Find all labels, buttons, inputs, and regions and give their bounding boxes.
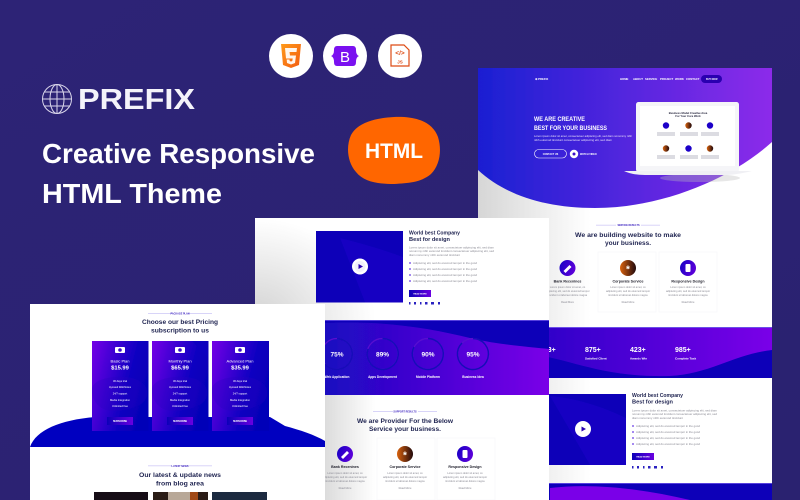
service card: responsive: Lorem ipsum dolor sit amet, co xyxy=(670,285,706,289)
provider heading: Service your business. xyxy=(369,426,441,433)
icon: bootstrap: B xyxy=(340,49,350,66)
provider heading xyxy=(357,410,454,433)
about copy: Adipiscing elit, sed do eiusmod tempor in the good xyxy=(413,267,478,271)
progress ring: 90% xyxy=(412,338,444,379)
service card: bank: Lorem ipsum dolor sit amet, co xyxy=(550,285,586,289)
about section: diam nonummy nibh euismod tincidunt xyxy=(632,416,683,420)
hero buttons xyxy=(534,150,597,158)
service card: corporate: * xyxy=(626,264,630,276)
pricing heading: Choose our best Pricing xyxy=(142,319,218,326)
pricing card: basic: Media Integration xyxy=(110,398,131,402)
icon: js file: JS xyxy=(397,60,403,64)
hero section xyxy=(478,68,772,208)
pricing card: basic: SUBSCRIBE xyxy=(113,420,127,423)
pricing card: advanced: 30 days trial xyxy=(233,379,247,383)
service card: corporate: Read More xyxy=(622,300,635,304)
badge: HTML: HTML xyxy=(365,140,423,163)
laptop mockup: Business Model Creative Area xyxy=(669,111,708,115)
service card: responsive: Responsive Design xyxy=(671,280,705,284)
about section: Best for design xyxy=(632,400,674,406)
about section: Adipiscing elit, sed do eiusmod tempor in the good xyxy=(636,430,701,434)
services heading: We are building website to make xyxy=(575,232,681,239)
progress ring: 90%: 90% xyxy=(421,352,435,358)
brand logo xyxy=(42,84,196,116)
stats band xyxy=(549,327,772,378)
about copy: READ MORE xyxy=(413,292,427,296)
hero nav: CONTACT xyxy=(686,77,700,81)
provider card: responsive: Read More xyxy=(459,486,472,490)
tech icons xyxy=(269,34,422,78)
service card: responsive: tincidunt ut laboreet dolore magna xyxy=(668,293,708,297)
panel: right page preview xyxy=(478,68,772,500)
about section: READ MORE xyxy=(636,456,650,458)
pricing card: monthly: 24/7 support xyxy=(173,392,187,396)
service card: bank xyxy=(545,260,590,304)
pricing card: monthly: Aymasit Webhiotes xyxy=(169,385,192,389)
pricing card: advanced: 24/7 support xyxy=(233,392,247,396)
title: Creative Responsive xyxy=(42,138,315,169)
pricing heading: subscription to us xyxy=(151,328,209,334)
hero nav: HOME xyxy=(620,77,629,81)
progress ring: 89% xyxy=(367,338,398,379)
panel: middle page preview xyxy=(255,218,549,500)
icon: js file xyxy=(378,34,422,78)
bottom band xyxy=(549,483,772,500)
wordmark: PREFIX xyxy=(78,84,196,116)
provider card: bank: Bank Recenines xyxy=(331,465,359,469)
pricing card: advanced xyxy=(212,341,269,431)
icon: globe xyxy=(42,84,72,114)
pricing card: monthly: Unlimited free xyxy=(172,404,189,408)
stats band: 985+ xyxy=(675,347,691,354)
service card: responsive xyxy=(666,260,710,303)
progress ring: 75%: 75% xyxy=(330,352,344,358)
hero copy xyxy=(534,117,633,142)
provider card: corporate: tincidunt ut laboreet dolore magna xyxy=(385,479,425,483)
about copy: diam nonummy nibh euismod tincidunt xyxy=(409,253,460,257)
blog heading: Our latest & update news xyxy=(139,472,221,479)
about copy: Adipiscing elit, sed do eiusmod tempor in the good xyxy=(413,273,478,277)
pricing card: advanced: Unlimited free xyxy=(232,404,249,408)
provider card: bank: tincidunt ut laboreet dolore magna xyxy=(325,479,365,483)
pricing card: basic: 30 days trial xyxy=(113,379,127,383)
about copy: Adipiscing elit, sed do eiusmod tempor in the good xyxy=(413,279,478,283)
provider card: corporate: Lorem ipsum dolor sit amet, co xyxy=(387,471,423,475)
pricing card: basic: $15.99 xyxy=(111,366,130,372)
hero nav: SERVICE xyxy=(645,77,657,81)
progress ring: 90%: Mobile Platform xyxy=(416,375,440,379)
services heading xyxy=(575,224,681,247)
stats band: About App xyxy=(530,356,545,360)
service card: responsive: Read More xyxy=(682,300,695,304)
provider card: responsive: tincidunt ut laboreet dolore magna xyxy=(445,479,485,483)
service card: bank: Bank Recenines xyxy=(554,280,581,284)
pricing card: advanced: $35.99 xyxy=(231,366,250,372)
provider card: corporate: * xyxy=(403,450,407,462)
stats band: 875+ xyxy=(585,347,601,354)
about copy: World best Company xyxy=(409,230,461,236)
laptop mockup: For Your Core Work xyxy=(675,114,701,118)
about section: nonummy nibh euismod tincidunt consectetuer adipiscing elit, sed xyxy=(632,412,718,416)
stats band: 423+ xyxy=(630,347,646,354)
hero copy: nibh euismod tincidunt consectetuer adipiscing elit, sed diam xyxy=(534,139,612,142)
pricing card: monthly: SUBSCRIBE xyxy=(173,420,187,423)
provider card: corporate xyxy=(383,446,428,489)
service card: bank: adipiscing elit, sed do eiusmod tempor xyxy=(545,289,590,293)
progress ring: 75%: Web Application xyxy=(325,375,349,379)
pricing heading xyxy=(142,312,218,334)
hero copy: WE ARE CREATIVE xyxy=(534,117,585,123)
about section: Adipiscing elit, sed do eiusmod tempor in the good xyxy=(636,424,701,428)
pricing heading: PACKAGE PLAN xyxy=(171,312,190,315)
progress ring: 75% xyxy=(322,338,352,379)
provider card: responsive: Responsive Design xyxy=(448,465,482,469)
about section xyxy=(549,393,717,468)
progress ring: 89%: Apps Development xyxy=(368,375,398,379)
panel: left pricing preview xyxy=(30,304,325,500)
provider card: responsive xyxy=(443,446,488,489)
pricing card: monthly: Media Integration xyxy=(170,398,191,402)
blog heading: LATEST NEWS xyxy=(172,465,189,468)
hero nav: PROJECT xyxy=(660,77,674,81)
service card: corporate xyxy=(606,260,650,303)
about section: World best Company xyxy=(632,393,684,399)
service card: bank: tincidunt ut laboreet dolore magna xyxy=(548,293,588,297)
progress ring: 95% xyxy=(457,338,488,379)
about copy: Adipiscing elit, sed do eiusmod tempor in the good xyxy=(413,261,478,265)
icon: js file: </> xyxy=(395,50,405,57)
about section: Adipiscing elit, sed do eiusmod tempor in the good xyxy=(636,436,701,440)
blog images xyxy=(94,492,267,500)
provider card: bank xyxy=(323,446,367,490)
provider heading: We are Provider For the Below xyxy=(357,418,454,425)
stats band: Complete Task xyxy=(675,356,696,360)
provider card: bank: Read More xyxy=(339,486,352,490)
blue hill xyxy=(30,417,325,447)
pricing card: monthly: Monthly Plan xyxy=(168,358,192,364)
provider card: responsive: adipiscing elit, sed do eiusmod tempor xyxy=(443,475,487,479)
service card: corporate: Corporate Service xyxy=(613,280,643,284)
pricing card: advanced: Aymasit Webhiotes xyxy=(229,385,252,389)
about copy xyxy=(409,230,495,304)
provider card: responsive: Lorem ipsum dolor sit amet, co xyxy=(447,471,483,475)
service card: responsive: adipiscing elit, sed do eiusmod tempor xyxy=(666,289,710,293)
service card: corporate: Lorem ipsum dolor sit amet, co xyxy=(610,285,646,289)
pricing card: basic: Basic Plan xyxy=(111,358,129,364)
progress ring: 95%: 95% xyxy=(466,352,480,358)
pricing card: basic xyxy=(92,341,148,431)
hero copy: Lorem ipsum dolor sit amet, consectetuer adipiscing elit, sed diam nonummy nibh xyxy=(534,135,633,138)
about video xyxy=(316,231,403,302)
progress ring: 89%: 89% xyxy=(376,352,389,358)
hero copy: BEST FOR YOUR BUSINESS xyxy=(534,126,607,132)
hero nav: ⊕ PREFIX xyxy=(535,77,548,81)
pricing card: basic: 24/7 support xyxy=(113,392,127,396)
hero buttons: WATCH VIDEO xyxy=(580,153,597,156)
about copy: Best for design xyxy=(409,237,451,243)
title: HTML Theme xyxy=(42,178,222,209)
provider card: corporate: Read More xyxy=(399,486,412,490)
stats band: Satisfied Client xyxy=(585,356,607,360)
about section: Lorem ipsum dolor sit amet, consectetuer adipiscing elit, sed diam xyxy=(632,408,717,412)
hero nav xyxy=(535,75,722,83)
service card: corporate: tincidunt ut laboreet dolore magna xyxy=(608,293,648,297)
pricing card: advanced: Advanced Plan xyxy=(227,358,253,364)
provider card: bank: Lorem ipsum dolor sit amet, co xyxy=(327,471,363,475)
provider card: corporate: adipiscing elit, sed do eiusmod tempor xyxy=(383,475,427,479)
service card: bank: Read More xyxy=(561,300,574,304)
pricing card: advanced: SUBSCRIBE xyxy=(233,420,247,423)
laptop mockup xyxy=(624,102,752,182)
progress band xyxy=(325,320,549,395)
provider card: bank: adipiscing elit, sed do eiusmod tempor xyxy=(323,475,367,479)
badge: HTML xyxy=(348,117,440,184)
hero nav: WORK xyxy=(675,77,684,81)
pricing card: monthly xyxy=(152,341,208,431)
about copy: Lorem ipsum dolor sit amet, consectetuer adipiscing elit, sed diam xyxy=(409,246,494,250)
services heading: your business. xyxy=(605,240,651,247)
icon: bootstrap xyxy=(323,34,367,78)
hero nav: ABOUT xyxy=(633,77,643,81)
hero buttons: CONTACT US xyxy=(543,153,559,156)
about copy: nonummy nibh euismod tincidunt consectetuer adipiscing elit, sed xyxy=(409,249,495,253)
service card: corporate: adipiscing elit, sed do eiusmod tempor xyxy=(606,289,650,293)
icon: html5 xyxy=(269,34,313,78)
provider heading: SUPPORT RESULTS xyxy=(393,410,417,413)
provider card: corporate: Corporate Service xyxy=(390,465,420,469)
stats band: Awards Win xyxy=(630,356,647,360)
pricing card: monthly: $65.99 xyxy=(171,366,190,372)
pricing card: basic: Aymasit Webhiotes xyxy=(109,385,132,389)
blog heading xyxy=(139,465,221,488)
progress ring: 95%: Business Idea xyxy=(462,375,484,379)
services heading: SERVICE RESULTS xyxy=(617,224,640,227)
pricing card: basic: Unlimited free xyxy=(112,404,129,408)
stats band: 213+ xyxy=(540,347,556,354)
hero nav: BUY NOW xyxy=(706,78,718,81)
about section: Adipiscing elit, sed do eiusmod tempor in the good xyxy=(636,442,701,446)
title xyxy=(42,138,315,209)
blog heading: from blog area xyxy=(156,480,204,488)
pricing card: advanced: Media Integration xyxy=(230,398,251,402)
pricing card: monthly: 30 days trial xyxy=(173,379,187,383)
